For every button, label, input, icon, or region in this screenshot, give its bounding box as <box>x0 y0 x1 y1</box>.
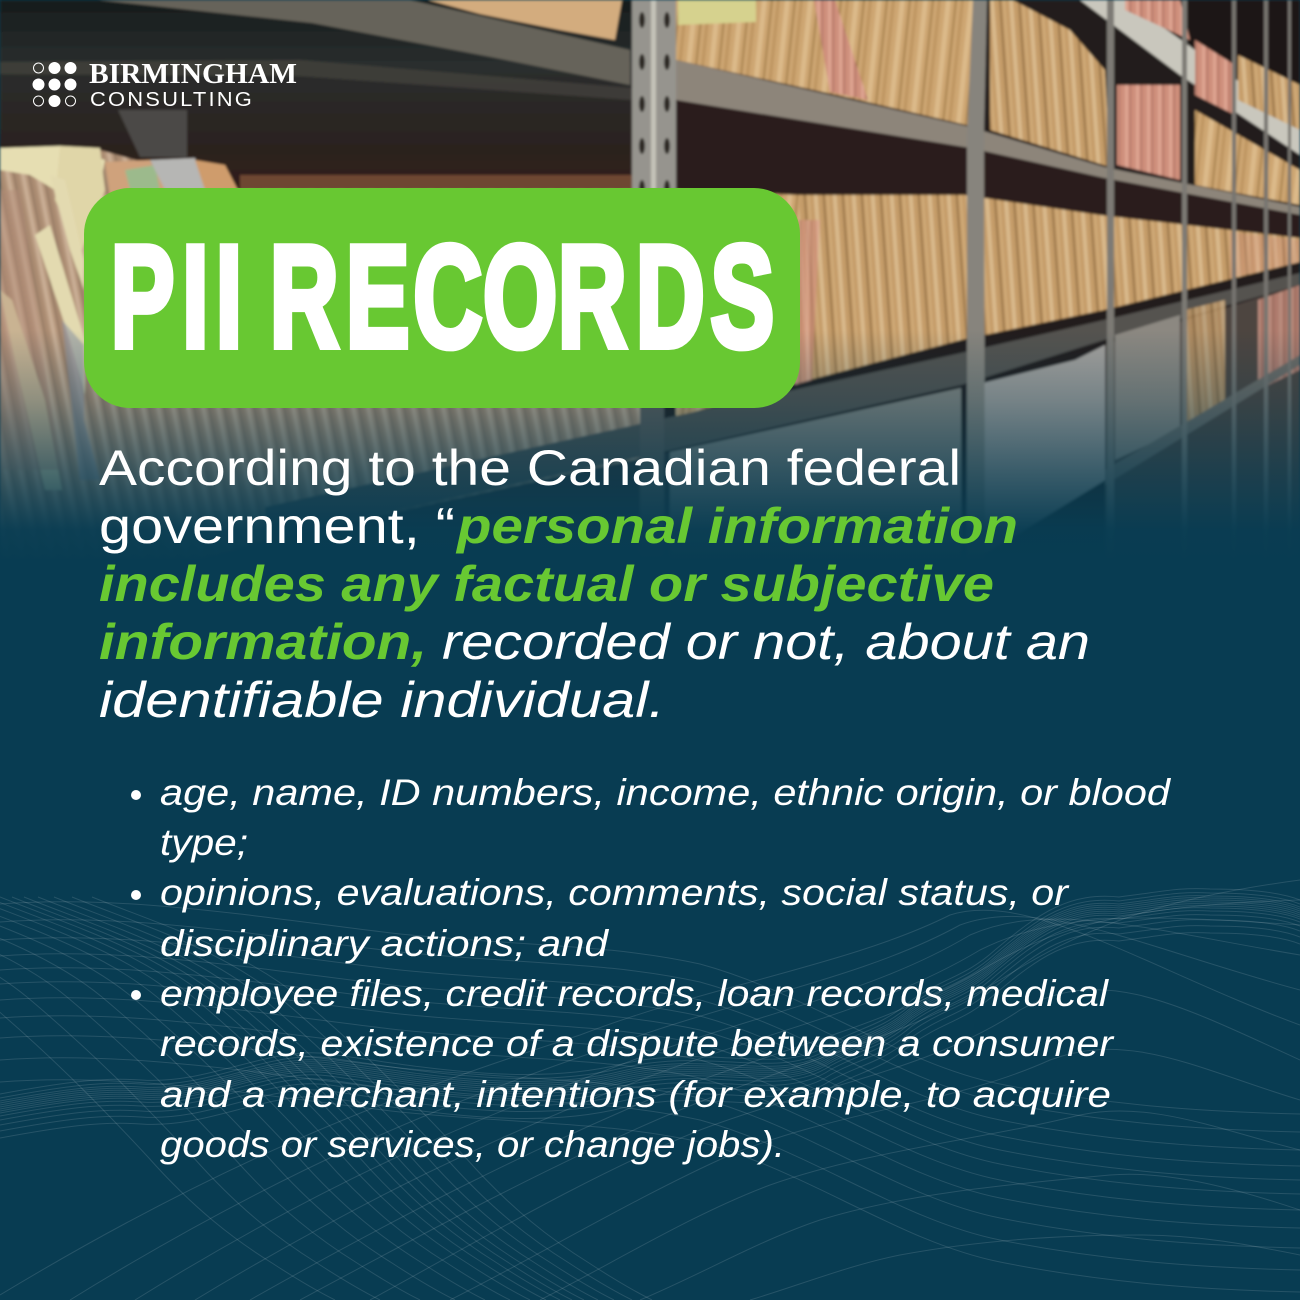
intro paragraph: government, “ <box>99 498 455 554</box>
left files <box>0 150 650 560</box>
lower shelf metal <box>265 273 1300 540</box>
mixed file tops <box>105 160 165 195</box>
cream tabs <box>0 146 105 205</box>
files on left shelf <box>428 0 622 40</box>
shelf 1 metal <box>676 60 1300 215</box>
bullet list <box>131 772 1172 1165</box>
brown file tops <box>240 175 632 190</box>
intro paragraph: personal information <box>455 498 1018 554</box>
bullet 3: and a merchant, intentions (for example, to acquire <box>160 1074 1111 1115</box>
row 3 dark and files <box>1105 285 1300 560</box>
dark bay below shelf 1 <box>676 100 1300 240</box>
logo: Birmingham Consulting <box>33 58 297 111</box>
left pink files <box>0 190 60 470</box>
logo subtitle: CONSULTING <box>90 89 254 111</box>
background photo: archive shelves <box>0 0 1300 560</box>
bay horizontal band <box>0 60 632 100</box>
logo name: BIRMINGHAM <box>89 58 297 90</box>
title text: PII RECORDS <box>111 217 774 378</box>
photo fade to navy <box>0 330 1300 565</box>
pale tag <box>678 0 756 25</box>
bullet 3: goods or services, or change jobs). <box>160 1124 785 1165</box>
uprights <box>632 0 676 190</box>
boxes row 3 <box>670 388 961 560</box>
dark under left shelf <box>200 452 670 560</box>
title badge <box>84 188 800 408</box>
bullet 2: disciplinary actions; and <box>160 923 610 964</box>
logo dot grid <box>33 62 76 106</box>
bullet 1: age, name, ID numbers, income, ethnic origin, or blood <box>160 772 1172 813</box>
left metal shelf <box>98 0 630 85</box>
left dark upper bay <box>0 0 640 190</box>
badge background <box>84 188 800 408</box>
bullet 2: opinions, evaluations, comments, social status, or <box>160 872 1070 913</box>
intro paragraph: According to the Canadian federal <box>99 440 961 496</box>
cream strips <box>35 225 85 395</box>
top files row <box>676 0 975 127</box>
intro paragraph: includes any factual or subjective <box>99 556 994 612</box>
files row 2 <box>790 195 1300 385</box>
bullet 1: type; <box>160 822 248 863</box>
intro paragraph: identifiable individual. <box>99 672 665 728</box>
shelf 3 metal <box>1105 355 1300 485</box>
bullet 3 <box>131 973 1115 1165</box>
intro paragraph <box>99 440 1090 728</box>
blue shadow <box>62 320 100 480</box>
bullet 2 <box>131 872 1070 964</box>
top files second bay <box>990 0 1110 167</box>
bullet 1 <box>131 772 1172 863</box>
wave line pattern <box>0 880 1300 1300</box>
intro paragraph: information, <box>99 614 427 670</box>
files row 2 behind box <box>676 190 800 417</box>
pink folder <box>814 0 868 100</box>
intro paragraph: recorded or not, about an <box>442 614 1090 670</box>
dark top bay <box>1040 0 1300 150</box>
bullet 3: employee files, credit records, loan records, medical <box>160 973 1110 1014</box>
bullet 3: records, existence of a dispute between a consumer <box>160 1023 1115 1064</box>
bracket behind logo <box>118 110 187 157</box>
